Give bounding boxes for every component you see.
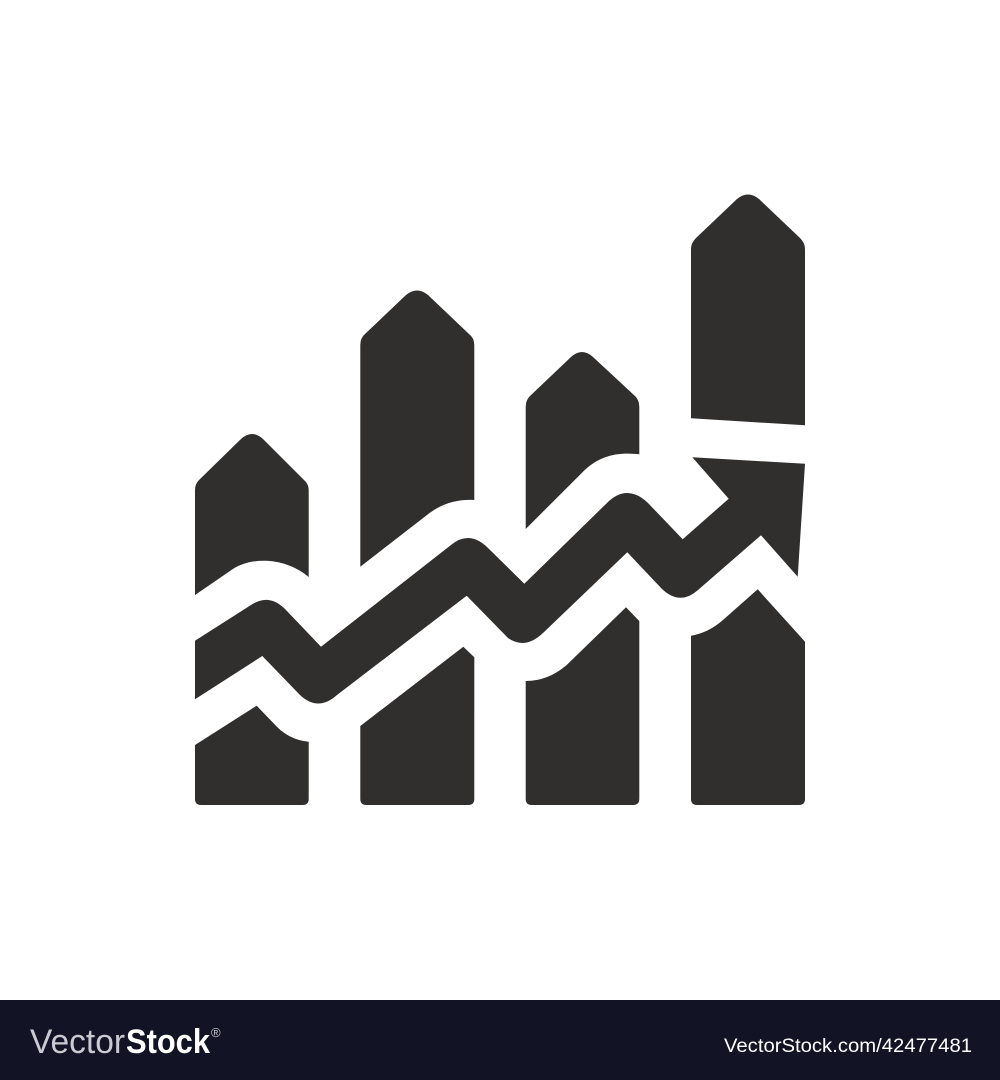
footer bar <box>0 1000 1000 1080</box>
bar 1 upper part <box>195 434 309 595</box>
footer logo <box>30 1023 221 1061</box>
bar 3 lower part <box>526 607 639 805</box>
footer logo: Vector <box>30 1023 125 1061</box>
bar 2 lower part <box>360 647 474 805</box>
bar 3 upper part <box>526 352 639 529</box>
footer logo: Stock <box>126 1023 210 1061</box>
icon: rising bar chart with arrow <box>195 194 805 805</box>
bar 1 lower part <box>195 706 309 805</box>
footer image id: VectorStock.com/42477481 <box>724 1036 972 1057</box>
bar 2 upper part <box>360 290 474 567</box>
bar 4 upper part <box>691 194 805 425</box>
bar 4 lower part <box>691 589 805 805</box>
footer logo: ® <box>211 1025 221 1040</box>
trend arrow <box>195 457 805 704</box>
